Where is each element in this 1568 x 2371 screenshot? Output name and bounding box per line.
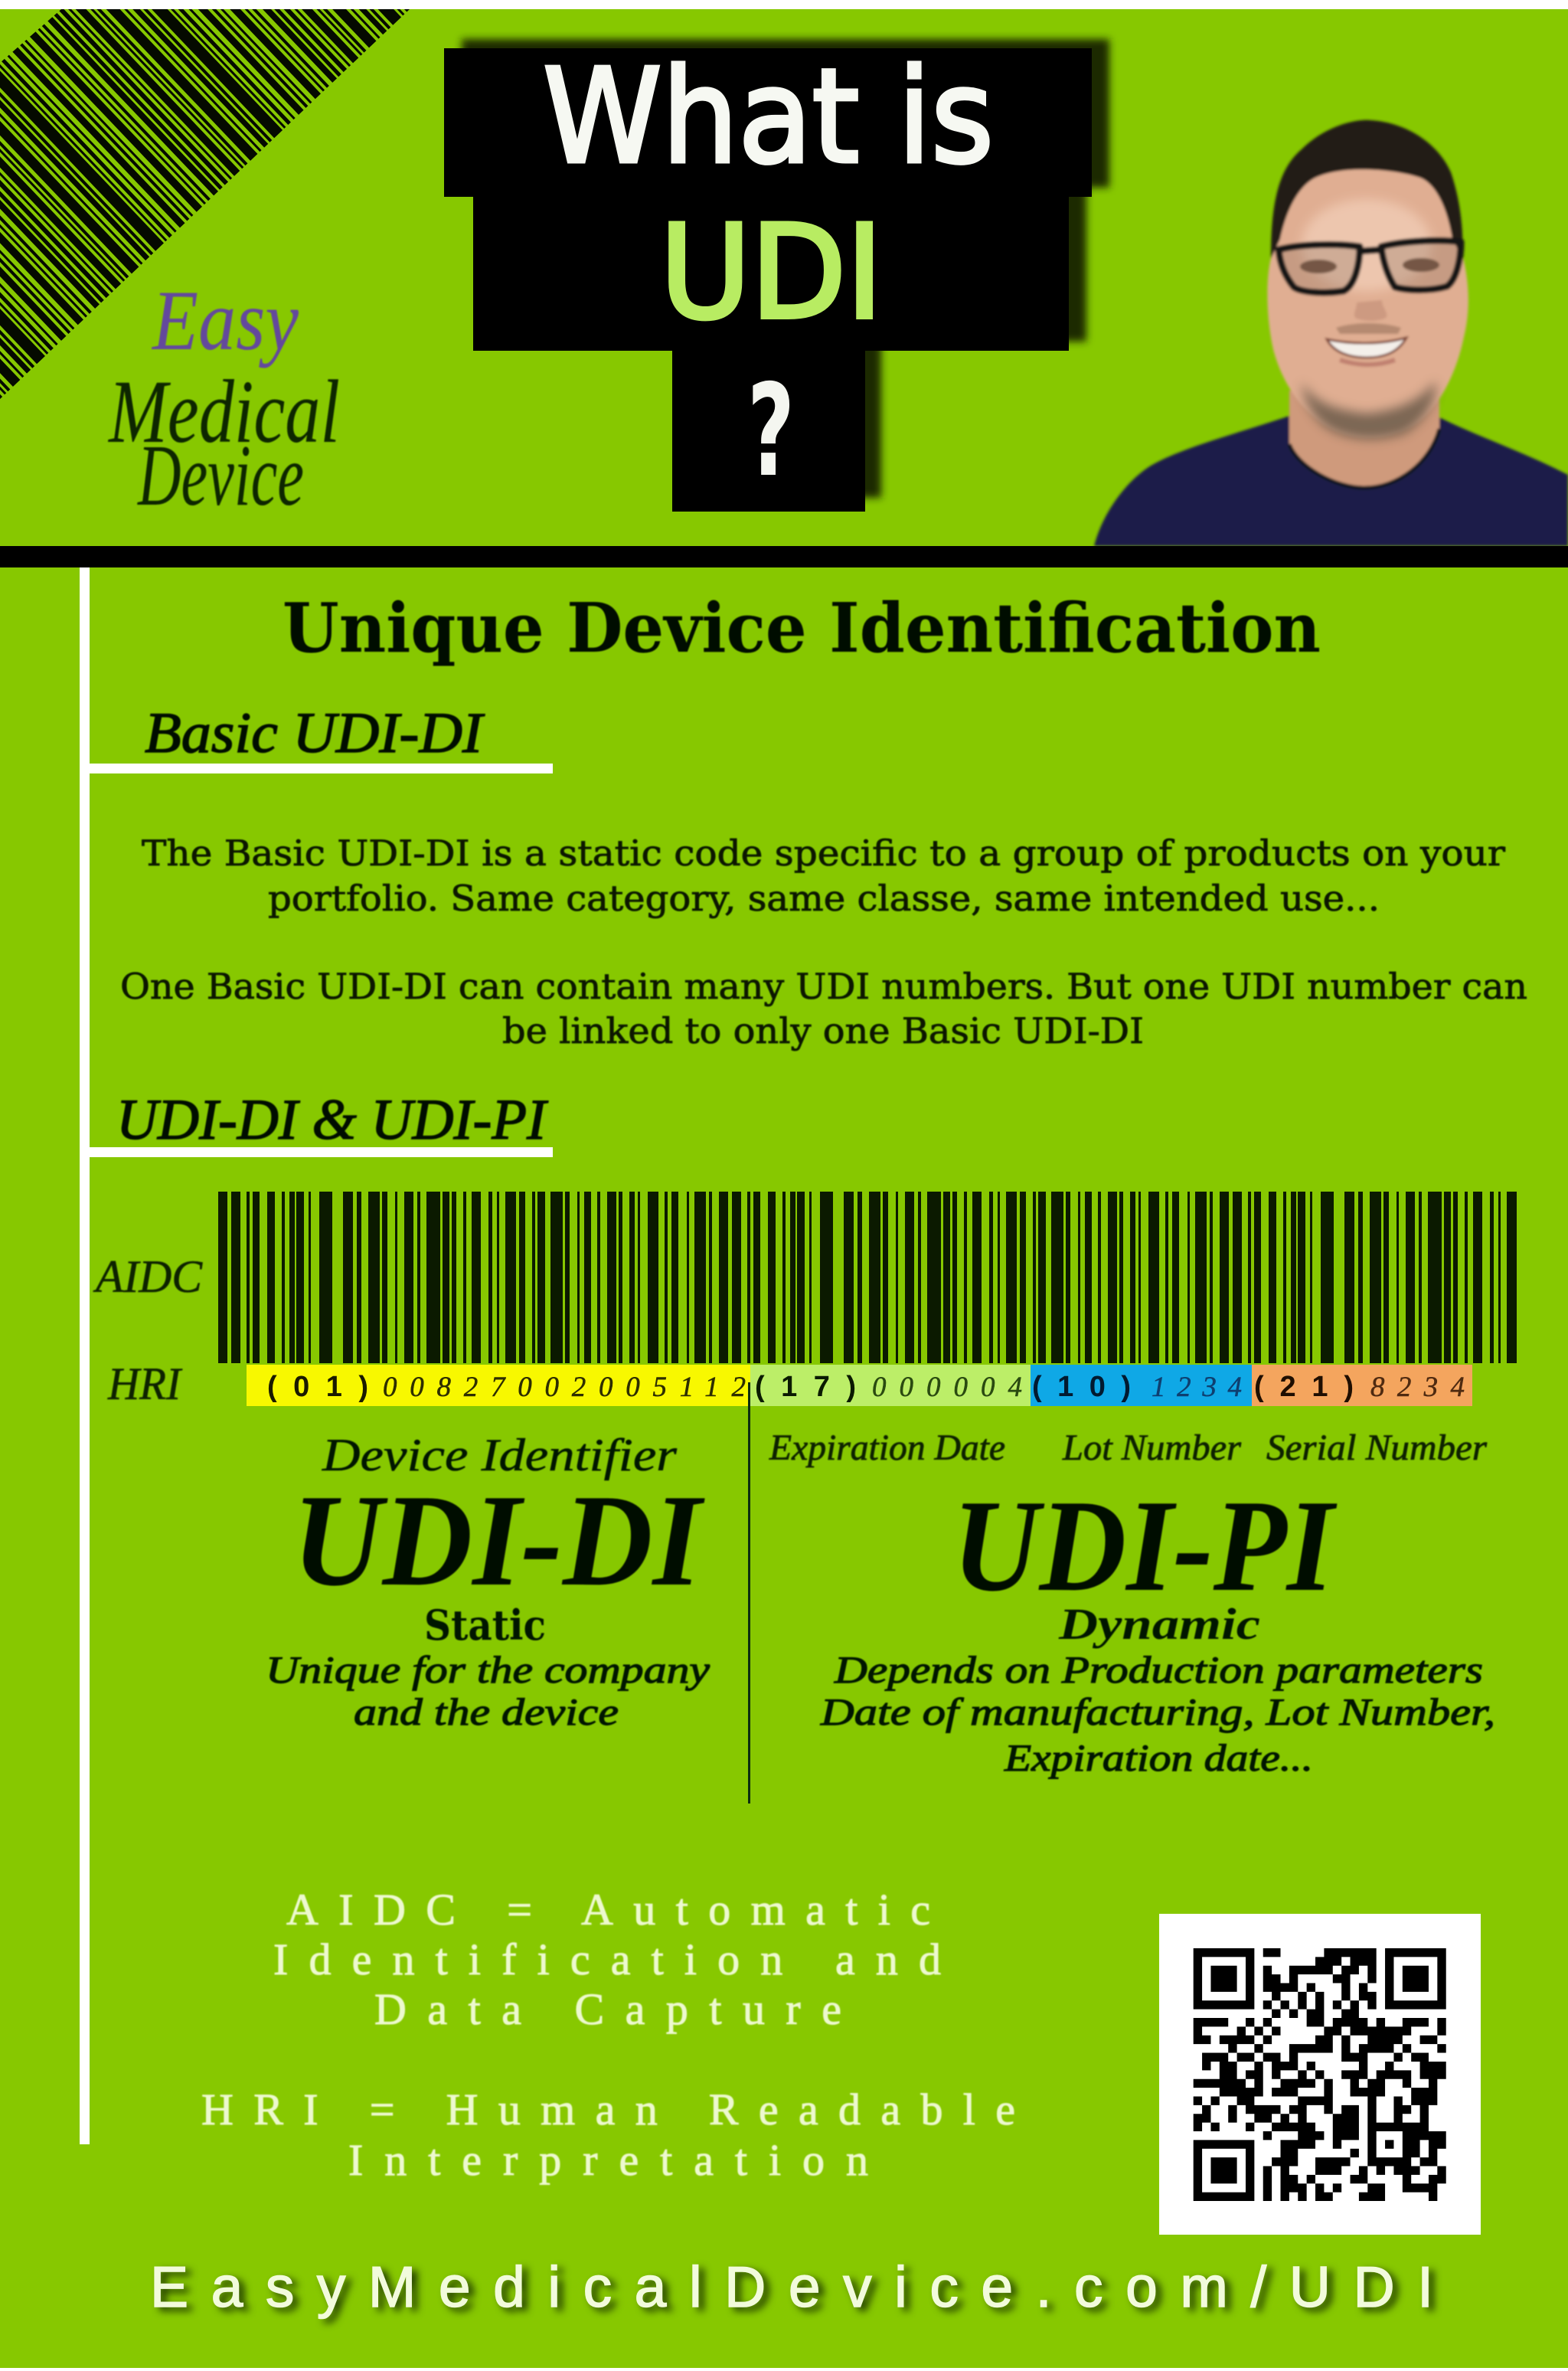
panel: UDI-DI: and the device bbox=[354, 1690, 619, 1733]
footer URL: EasyMedicalDevice.com/UDI: EasyMedicalDevice.com/UDI bbox=[150, 2255, 1433, 2319]
text block: Basic UDI-DI description: The Basic UDI-DI is a static code specific to a group of products on your bbox=[142, 832, 1505, 874]
panel: UDI-PI: UDI-PI bbox=[952, 1473, 1338, 1619]
HRI field labels: expiration, lot, serial: Serial Number bbox=[1266, 1428, 1487, 1468]
neck bbox=[1289, 391, 1439, 488]
HRI strip: (10) lot number: 1234 bbox=[1152, 1372, 1242, 1403]
acronym definitions: Data Capture bbox=[374, 1984, 841, 2034]
header: diagonal barcode decoration bbox=[0, 9, 410, 399]
HRI strip: (21) serial number bbox=[1252, 1365, 1472, 1406]
section heading: Basic UDI-DI bbox=[90, 701, 553, 773]
smile bbox=[1327, 338, 1406, 358]
HRI field labels: expiration, lot, serial: Lot Number bbox=[1062, 1428, 1241, 1468]
panel: UDI-DI: Unique for the company bbox=[266, 1648, 710, 1691]
nose bbox=[1354, 300, 1387, 321]
QR code bbox=[1159, 1914, 1481, 2235]
panel: UDI-PI: Date of manufacturing, Lot Number, bbox=[820, 1690, 1495, 1733]
title block: What is UDI ?: ? bbox=[747, 358, 795, 505]
hair bbox=[1271, 120, 1462, 259]
HRI strip: (01) device identifier: 00827002005112 bbox=[383, 1372, 746, 1403]
HRI strip: (01) device identifier bbox=[247, 1365, 750, 1406]
panel: UDI-PI: Depends on Production parameters bbox=[834, 1648, 1483, 1691]
divider between UDI-DI and UDI-PI bbox=[748, 1382, 750, 1804]
text block: Basic UDI-DI description bbox=[120, 832, 1527, 1051]
HRI strip: (17) expiration date: (17) bbox=[755, 1371, 856, 1403]
panel: UDI-DI: Device Identifier bbox=[322, 1430, 678, 1480]
logo: Easy Medical Device: Easy bbox=[151, 273, 299, 368]
text block: Basic UDI-DI description: One Basic UDI-DI can contain many UDI numbers. But one UDI number can bbox=[120, 966, 1527, 1007]
acronym definitions: HRI = Human Readable bbox=[201, 2085, 1015, 2134]
section heading: UDI-DI & UDI-PI: UDI-DI & UDI-PI bbox=[116, 1088, 548, 1152]
panel: UDI-DI bbox=[266, 1430, 710, 1733]
title block: What is UDI ? bbox=[444, 41, 1092, 512]
HRI field labels: expiration, lot, serial: Expiration Date bbox=[769, 1428, 1005, 1468]
label: HRI: HRI bbox=[107, 1359, 183, 1409]
HRI strip: (17) expiration date: 000004 bbox=[872, 1372, 1022, 1403]
HRI strip: (17) expiration date bbox=[750, 1365, 1031, 1406]
HRI strip: (21) serial number: (21) bbox=[1254, 1371, 1354, 1403]
barcode: AIDC bars bbox=[218, 1192, 1517, 1363]
HRI strip: (21) serial number: 8234 bbox=[1370, 1372, 1465, 1403]
acronym definitions bbox=[201, 1885, 1015, 2185]
panel: UDI-DI: UDI-DI bbox=[292, 1468, 705, 1614]
text block: Basic UDI-DI description: be linked to only one Basic UDI-DI bbox=[502, 1010, 1144, 1051]
stubble bbox=[1302, 381, 1436, 440]
title block shadow bbox=[462, 39, 1109, 498]
section heading: Basic UDI-DI: Basic UDI-DI bbox=[145, 701, 485, 765]
panel: UDI-PI: Dynamic bbox=[1058, 1599, 1260, 1649]
acronym definitions: Identification and bbox=[273, 1934, 941, 1984]
panel: UDI-DI: Static bbox=[424, 1601, 546, 1650]
title block: What is UDI ?: What is bbox=[543, 41, 994, 193]
HRI strip: (10) lot number: (10) bbox=[1032, 1371, 1131, 1403]
HRI strip: (10) lot number bbox=[1031, 1365, 1252, 1406]
panel: UDI-PI bbox=[820, 1473, 1495, 1779]
panel: UDI-PI: Expiration date... bbox=[1004, 1736, 1313, 1779]
sweater bbox=[1094, 416, 1568, 546]
title block: What is UDI ?: UDI bbox=[660, 198, 883, 348]
portrait: smiling man with glasses bbox=[1094, 120, 1568, 546]
logo: Easy Medical Device: Device bbox=[137, 427, 304, 524]
HRI field labels: expiration, lot, serial bbox=[769, 1428, 1487, 1468]
logo: Easy Medical Device: Medical bbox=[107, 361, 340, 462]
acronym definitions: AIDC = Automatic bbox=[286, 1885, 930, 1934]
logo: Easy Medical Device bbox=[107, 273, 340, 524]
header divider: black band bbox=[0, 546, 1568, 567]
HRI strip: (01) device identifier: (01) bbox=[267, 1371, 368, 1403]
face highlight bbox=[1302, 199, 1432, 291]
text block: Basic UDI-DI description: portfolio. Same category, same classe, same intended use... bbox=[268, 878, 1380, 919]
glasses bbox=[1279, 240, 1461, 293]
acronym definitions: Interpretation bbox=[348, 2135, 868, 2185]
left white rail bbox=[80, 567, 90, 2144]
face bbox=[1267, 167, 1468, 438]
eyes bbox=[1300, 260, 1337, 273]
label: AIDC: AIDC bbox=[93, 1251, 203, 1302]
heading: Unique Device Identification: Unique Device Identification bbox=[283, 587, 1321, 668]
